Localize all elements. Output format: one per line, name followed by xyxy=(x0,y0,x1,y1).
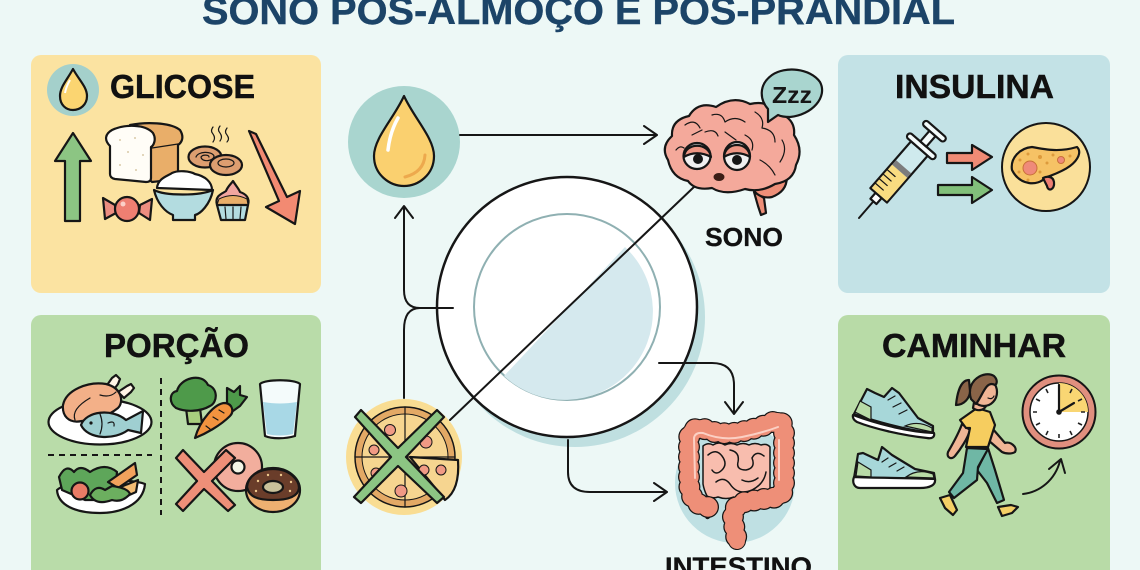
icon: chocolate donut xyxy=(246,468,300,512)
panel: glicose xyxy=(31,55,321,293)
icon: dinner plate xyxy=(437,177,705,447)
heading: glicose: GLICOSE xyxy=(110,68,255,105)
speech bubble: Zzz: Zzz xyxy=(772,82,812,108)
icon: plate with chicken and fish xyxy=(48,375,152,444)
icon: syringe xyxy=(845,117,950,230)
icon: top shoe xyxy=(853,388,934,438)
icon: large drop circle xyxy=(348,86,460,198)
icon: intestine xyxy=(675,421,795,543)
icon: pancreas in circle xyxy=(1002,123,1090,211)
icon: bread xyxy=(106,123,182,182)
icon: up arrow xyxy=(55,133,91,221)
icon: sleepy brain xyxy=(665,100,800,215)
arrow: curved to clock xyxy=(1023,459,1065,494)
icon: rice bowl xyxy=(154,171,213,220)
arrow: plate to intestine top xyxy=(659,363,743,414)
arrow: pizza up to drop xyxy=(395,206,453,398)
icon: coral x xyxy=(176,450,235,511)
icon: cupcake xyxy=(216,181,249,220)
line: pizza to brain diagonal xyxy=(450,186,695,420)
icon: glucose drop xyxy=(47,64,99,116)
icon: cinnamon rolls xyxy=(188,126,242,175)
arrow: green xyxy=(938,177,992,203)
icon: candy xyxy=(103,197,152,221)
icon: pizza crossed out xyxy=(346,399,462,515)
icon: water glass xyxy=(260,380,300,438)
speech bubble: Zzz xyxy=(762,70,822,122)
icon: salad bowl xyxy=(57,463,145,513)
panel: porção xyxy=(31,315,321,570)
heading: porção: PORÇÃO xyxy=(104,327,249,364)
icon: carrot xyxy=(195,386,247,438)
heading: insulina: INSULINA xyxy=(895,68,1054,105)
icon: walking woman xyxy=(940,374,1018,516)
heading: caminhar: CAMINHAR xyxy=(882,327,1066,364)
icon: down arrow xyxy=(249,131,300,224)
arrow: plate to intestine side xyxy=(568,440,667,501)
panel: caminhar xyxy=(838,315,1110,570)
divider lines xyxy=(48,378,161,515)
icon: broccoli xyxy=(171,378,216,424)
icon: pink donut xyxy=(214,443,262,491)
arrow: drop to brain xyxy=(460,126,657,144)
icon: bottom shoe xyxy=(853,447,935,488)
arrow: coral xyxy=(947,145,992,170)
panel: insulina xyxy=(838,55,1110,293)
icon: clock xyxy=(1022,376,1096,448)
label: sono: SONO xyxy=(705,222,783,252)
